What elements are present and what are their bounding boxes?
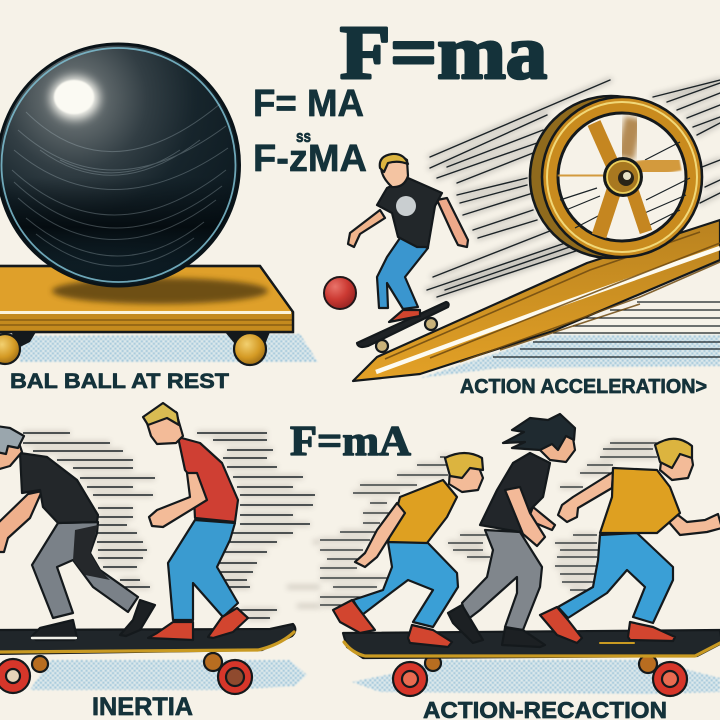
figure: skater two in black	[448, 414, 575, 647]
t-shirt	[20, 453, 98, 523]
arm	[149, 473, 207, 527]
icon: long skateboard	[343, 630, 720, 696]
back shoe	[540, 607, 582, 643]
t-shirt	[480, 453, 550, 532]
t-shirt	[388, 480, 457, 543]
right arm	[437, 198, 468, 247]
skateboard	[357, 302, 449, 347]
left sneaker	[32, 620, 77, 640]
head	[540, 432, 575, 462]
formula: small glyph: ss	[296, 127, 311, 146]
shoe	[389, 310, 420, 322]
motion lines through wheel	[560, 142, 690, 228]
back arm	[558, 472, 613, 522]
panel: ball at rest	[0, 44, 318, 393]
icon: wooden ramp	[353, 220, 720, 381]
jeans	[377, 238, 428, 309]
icon: long skateboard	[0, 624, 295, 694]
icon: red ball	[324, 277, 356, 309]
icon: large black ball	[0, 44, 240, 286]
trousers	[168, 520, 238, 620]
halftone under ramp	[420, 335, 720, 378]
jeans	[353, 542, 458, 627]
front shoe	[628, 622, 675, 641]
figure: skater in red	[143, 403, 248, 640]
t-shirt	[178, 437, 238, 522]
t-shirt	[600, 468, 680, 533]
panel: inertia	[0, 403, 320, 720]
ball contact shadow	[52, 278, 268, 304]
figure: skater one in yellow	[333, 453, 483, 647]
halftone shadow under plank	[18, 334, 318, 362]
spokes	[558, 118, 680, 236]
hair	[445, 453, 483, 478]
head	[147, 412, 183, 444]
hair	[143, 403, 179, 425]
arm	[0, 491, 42, 552]
t-shirt	[377, 178, 442, 247]
halftone shadow	[30, 660, 307, 690]
back shoe	[333, 600, 375, 633]
head	[0, 440, 22, 470]
label: action acceleration: ACTION ACCELERATION>	[460, 376, 707, 398]
hair	[655, 439, 692, 468]
right shoe	[208, 608, 248, 638]
front arm	[667, 514, 720, 535]
motion lines	[320, 443, 660, 605]
head	[660, 446, 693, 480]
icon: wooden plank cart	[0, 266, 293, 365]
left shoe	[448, 605, 483, 643]
head	[381, 155, 408, 187]
right shoe	[502, 628, 545, 647]
right sneaker	[120, 600, 155, 636]
jeans	[558, 533, 673, 623]
front arm	[505, 487, 545, 546]
panel: action-reaction	[320, 414, 720, 720]
motion lines under ramp	[493, 302, 720, 357]
back arm	[528, 507, 555, 530]
trousers	[462, 530, 542, 630]
arm	[355, 503, 405, 567]
halftone shadow	[352, 660, 720, 694]
title: F=ma: F=ma	[340, 11, 547, 95]
formula: F-2MA: F-zMA	[253, 138, 367, 180]
label: ball at rest: BAL BALL AT REST	[10, 370, 229, 393]
left arm	[348, 210, 385, 247]
hair	[380, 154, 408, 172]
spiky hair	[503, 414, 575, 450]
formula group	[253, 83, 367, 180]
figure: skater on ramp	[348, 154, 468, 352]
hair	[0, 426, 24, 454]
head	[449, 460, 483, 492]
motion lines	[23, 433, 320, 618]
motion lines upper	[427, 80, 720, 297]
figure: skater in black	[0, 426, 155, 640]
icon: golden wheel	[530, 96, 702, 258]
figure: skater three in yellow	[540, 439, 720, 643]
formula: F= MA: F= MA	[253, 83, 364, 125]
panel: action acceleration	[324, 80, 720, 398]
left shoe	[148, 622, 193, 640]
front shoe	[408, 625, 452, 647]
trousers	[32, 522, 138, 618]
formula: F=mA: F=mA	[290, 419, 412, 465]
